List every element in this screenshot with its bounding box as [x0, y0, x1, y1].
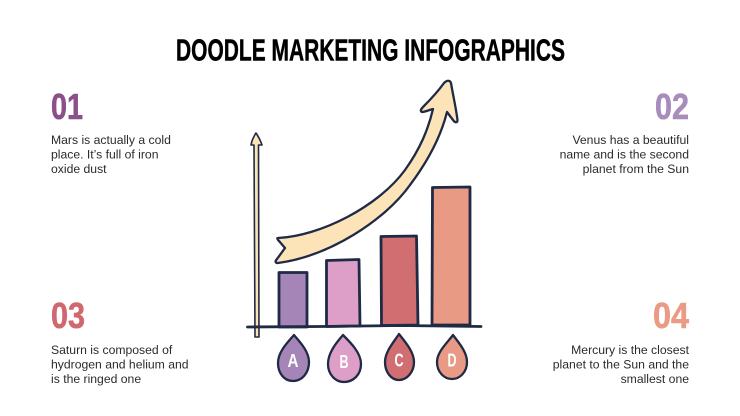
chart: doodle bar chart [248, 81, 481, 382]
text block 03: is the ringed one [51, 372, 141, 386]
number 01: 01 [51, 86, 83, 127]
text block 04: planet to the Sun and the [553, 358, 689, 372]
drop B [328, 335, 361, 382]
text block 04: smallest one [621, 372, 689, 386]
drop C [385, 334, 414, 380]
drop B: B [340, 352, 348, 372]
bar A [279, 272, 307, 327]
text block 01: place. It’s full of iron [51, 148, 158, 162]
text block 04: Mercury is the closest [571, 343, 690, 357]
number 03: 03 [51, 295, 85, 336]
drop A [278, 335, 309, 381]
bar B [326, 260, 360, 326]
title: DOODLE MARKETING INFOGRAPHICS [176, 32, 565, 68]
text block 02: Venus has a beautiful [572, 133, 689, 147]
text block 01: Mars is actually a cold [51, 133, 171, 147]
text block 01: oxide dust [51, 162, 107, 176]
bar C [381, 236, 418, 326]
drop A: A [288, 351, 298, 371]
drop D [437, 335, 467, 379]
arrow: vertical axis [251, 133, 262, 337]
number 04: 04 [653, 295, 689, 336]
panel: item 01 [51, 86, 171, 176]
panel: item 02 [560, 86, 689, 176]
text block 03: Saturn is composed of [51, 343, 173, 357]
text block 02: planet from the Sun [583, 162, 689, 176]
arrow: growth curve [276, 81, 458, 263]
drop C: C [394, 350, 404, 370]
text block 02: name and is the second [560, 148, 689, 162]
number 02: 02 [655, 86, 689, 127]
drop D: D [448, 350, 456, 370]
panel: item 03 [51, 295, 189, 386]
axis baseline [248, 326, 481, 327]
text block 03: hydrogen and helium and [51, 358, 189, 372]
bar D [432, 187, 470, 325]
panel: item 04 [553, 295, 690, 386]
